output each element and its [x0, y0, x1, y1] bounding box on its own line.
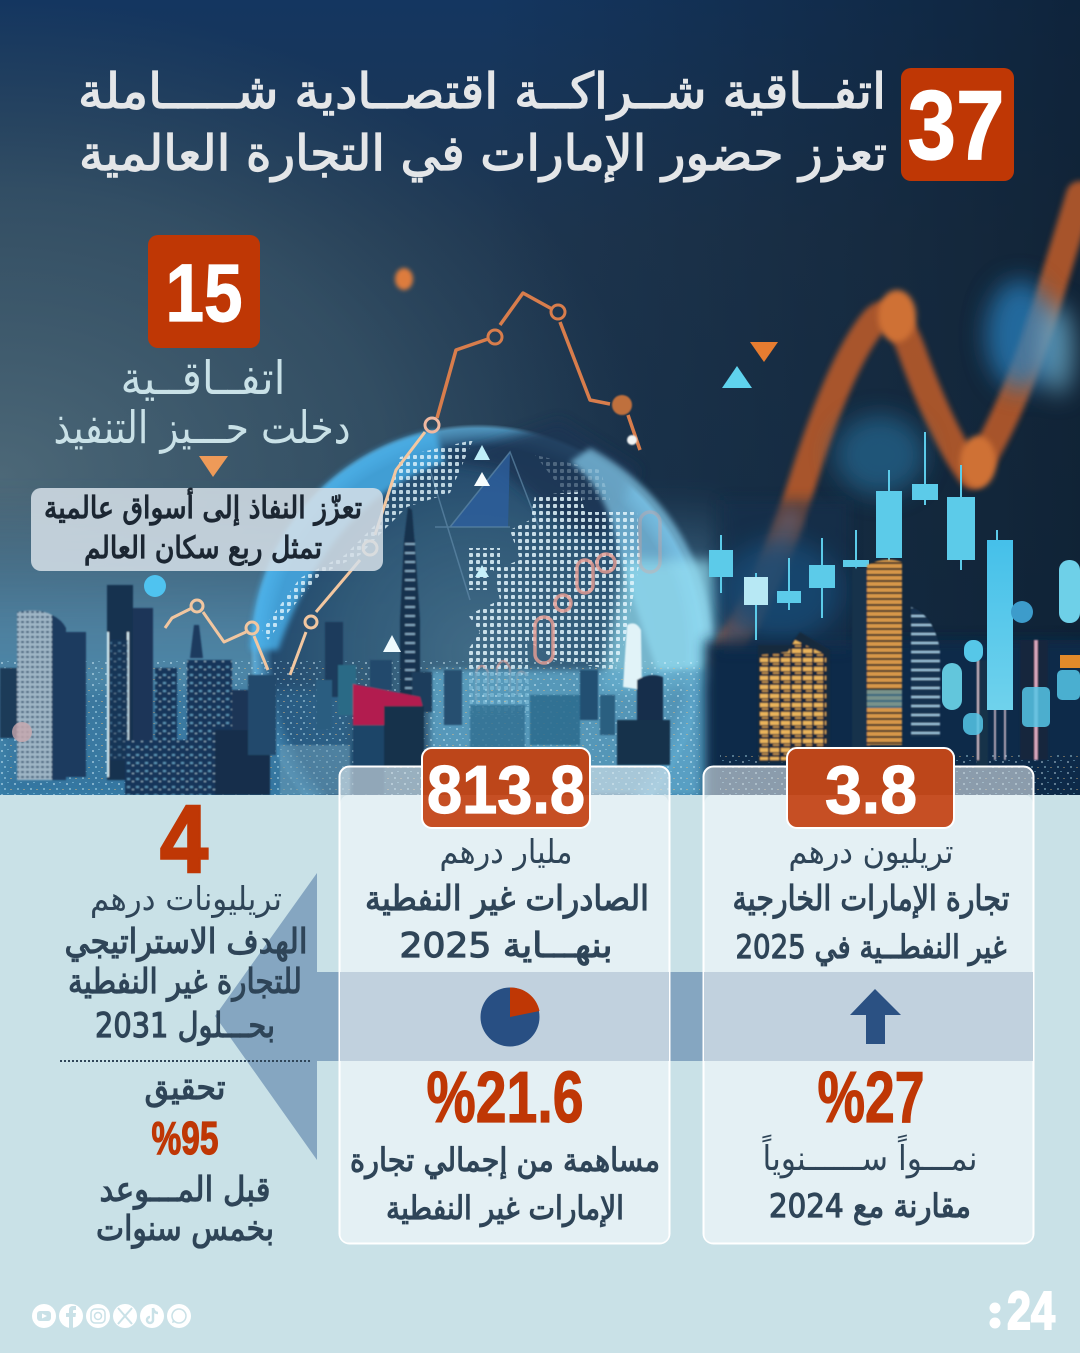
- glowing capsules: [12, 540, 1080, 742]
- card text: %21.6: [426, 1058, 584, 1138]
- callout: global market access: تعزّز النفاذ إلى أسواق عالمية: [44, 487, 362, 526]
- achievement text: بخمس سنوات: [96, 1209, 274, 1249]
- badge: 37 agreements: 37: [908, 70, 1004, 180]
- badge: 3.8: [787, 748, 954, 828]
- panel: non-oil trade: [704, 748, 1034, 1244]
- card text: مقارنة مع 2024: [769, 1187, 971, 1225]
- thick orange market line: [722, 195, 1080, 655]
- achievement text: [96, 1068, 274, 1249]
- card text: الصادرات غير النفطية: [365, 879, 649, 919]
- card text: غير النفطــية في 2025: [736, 928, 1006, 966]
- badge: 15 agreements: 15: [166, 248, 242, 339]
- badge: 3.8: 3.8: [825, 752, 917, 828]
- callout: global market access: [31, 487, 383, 571]
- achievement text: %95: [152, 1112, 218, 1164]
- title heading: [78, 63, 887, 182]
- card text: مليار درهم: [440, 832, 572, 871]
- logo: 24: 24: [1007, 1281, 1055, 1341]
- panel: non-oil exports: [340, 748, 670, 1244]
- caption: 15 agreements in force: اتفــاقــية: [120, 351, 286, 405]
- city base: [0, 500, 1080, 810]
- caption: 15 agreements in force: [54, 351, 350, 454]
- arrow: orange pointer: [199, 456, 228, 477]
- card text: الإمارات غير النفطية: [386, 1189, 624, 1227]
- band with up arrow: [704, 972, 1033, 1061]
- caption: 15 agreements in force: دخلت حـــيز التنفيذ: [54, 401, 350, 454]
- badge: 15 agreements: [148, 235, 260, 348]
- candlesticks: [709, 432, 997, 640]
- arrow: band pointing to target: [215, 873, 339, 1160]
- card text: بنهـــاية 2025: [400, 926, 612, 966]
- thin orange chart line: [165, 293, 640, 675]
- left column: 2031 target: [60, 786, 311, 1249]
- badge: 813.8: 813.8: [427, 752, 585, 828]
- big number 4: 4: [160, 786, 208, 893]
- achievement text: تحقيق: [144, 1068, 226, 1108]
- blurred lights: [720, 280, 1074, 640]
- target text: تريليونات درهم: [90, 879, 282, 918]
- Burj tower: [400, 507, 420, 700]
- globe: [247, 424, 720, 795]
- dotted continents: [468, 492, 640, 715]
- pink chain: [476, 512, 660, 700]
- target text: للتجارة غير النفطية: [68, 962, 302, 1002]
- title heading: تعزز حضور الإمارات في التجارة العالمية: [79, 125, 887, 182]
- target text: [64, 879, 308, 1046]
- achievement text: قبل المـــوعد: [100, 1170, 270, 1210]
- lower panel background: [0, 795, 1080, 1353]
- hero photo: city, globe and market chart: [0, 0, 1080, 880]
- target text: بحـــلول 2031: [95, 1006, 275, 1046]
- market triangles: [383, 342, 778, 652]
- card text: تريليون درهم: [788, 832, 954, 871]
- target text: الهدف الاستراتيجي: [64, 922, 308, 962]
- band with pie chart: [340, 972, 669, 1061]
- skyline: [0, 507, 1048, 795]
- card text: [350, 832, 660, 1227]
- card text: نمـــواً ســــــنوياً: [762, 1134, 978, 1179]
- card text: مساهمة من إجمالي تجارة: [350, 1141, 660, 1179]
- card text: [732, 832, 1010, 1225]
- title heading: اتفــاقية شــراكــة اقتصــادية شـــــاملة: [78, 63, 886, 120]
- callout: global market access: تمثل ربع سكان العالم: [84, 531, 322, 566]
- logo: 24: [990, 1281, 1055, 1341]
- card text: %27: [818, 1058, 924, 1138]
- card text: تجارة الإمارات الخارجية: [732, 879, 1010, 919]
- connector band between cards: [670, 972, 703, 1061]
- social media icons: [32, 1304, 191, 1328]
